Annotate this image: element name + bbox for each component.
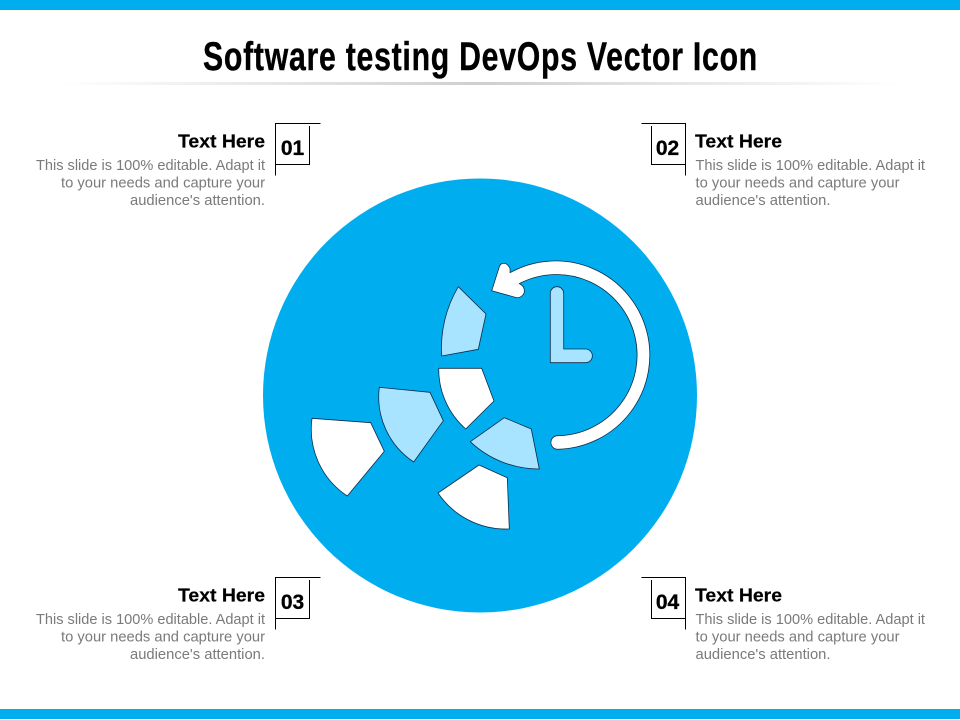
body text 02	[696, 157, 926, 209]
icon: circular arrow	[492, 261, 650, 449]
body text 04	[696, 611, 926, 663]
icon: software testing devops clock and segments	[311, 261, 650, 529]
body text 01: This slide is 100% editable. Adapt it	[36, 157, 266, 174]
segment: light right	[470, 418, 539, 469]
segment: light middle	[379, 387, 443, 462]
number badge 03	[276, 578, 320, 630]
segment: light top	[441, 287, 486, 356]
body text 04: to your needs and capture your	[696, 628, 900, 646]
body text 04: audience's attention.	[696, 646, 830, 663]
number badge 01: 01	[281, 137, 304, 160]
body text 01	[36, 157, 266, 209]
heading 01: Text Here	[178, 132, 265, 152]
body text 01: audience's attention.	[130, 192, 265, 209]
heading 04: Text Here	[695, 586, 782, 606]
callout 01	[36, 124, 320, 209]
body text 03: to your needs and capture your	[61, 628, 265, 646]
heading 02: Text Here	[695, 132, 782, 152]
body text 03: audience's attention.	[130, 646, 265, 663]
body text 02: to your needs and capture your	[696, 174, 900, 192]
title: Software testing DevOps Vector Icon	[203, 35, 758, 79]
body text 02: audience's attention.	[696, 192, 830, 209]
heading 03: Text Here	[178, 586, 265, 606]
bottom bar	[0, 709, 960, 719]
body text 04: This slide is 100% editable. Adapt it	[696, 611, 926, 628]
body text 03: This slide is 100% editable. Adapt it	[36, 611, 266, 628]
segment: white left	[311, 418, 384, 496]
number badge 04: 04	[656, 591, 679, 614]
icon: clock hands	[550, 287, 592, 363]
segment: white centre	[439, 368, 494, 429]
body text 03	[36, 611, 266, 663]
segment: white bottom	[438, 465, 509, 529]
central circle	[263, 178, 697, 612]
body text 02: This slide is 100% editable. Adapt it	[696, 157, 926, 174]
callout 03	[36, 578, 320, 663]
callout 04	[642, 578, 926, 663]
number badge 01	[276, 124, 320, 176]
number badge 04	[642, 578, 686, 630]
number badge 02	[642, 124, 686, 176]
body text 01: to your needs and capture your	[61, 174, 265, 192]
number badge 02: 02	[656, 137, 679, 160]
top bar	[0, 0, 960, 10]
number badge 03: 03	[281, 591, 304, 614]
title underline shadow	[60, 82, 900, 85]
callout 02	[642, 124, 926, 209]
